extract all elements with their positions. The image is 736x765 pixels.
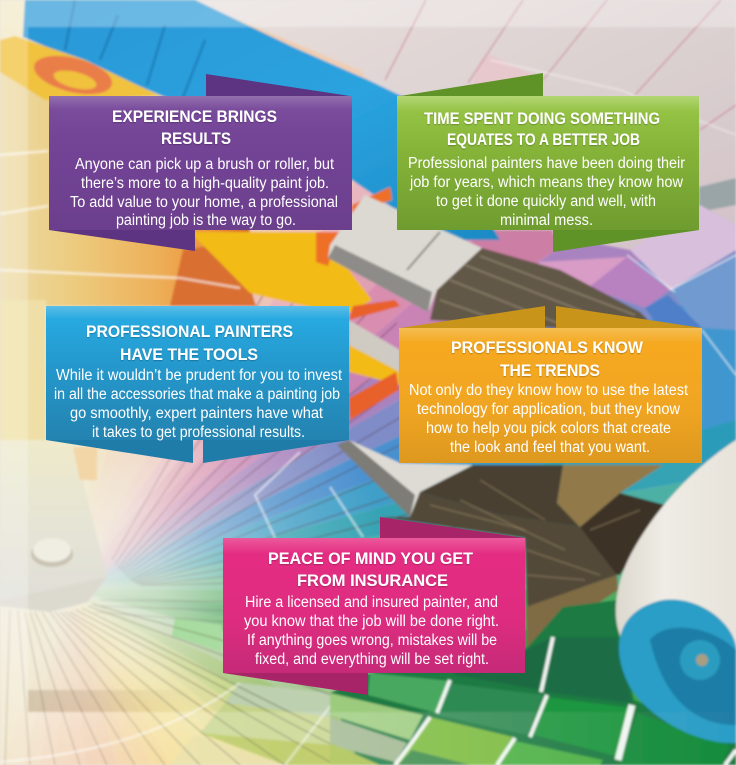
blue heading [86, 323, 293, 364]
green top fold [400, 73, 543, 96]
purple bottom fold [49, 230, 195, 251]
middle brush bristles [420, 465, 665, 575]
roller hub [680, 640, 720, 680]
green heading: EQUATES TO A BETTER JOB [447, 131, 640, 149]
roller nut [696, 654, 708, 666]
roller blue end cap [619, 599, 736, 743]
darker beige band at lower left [28, 690, 198, 712]
blue body text: go smoothly, expert painters have what [70, 405, 324, 422]
pink body text [244, 594, 499, 668]
green swatches bottom right [330, 600, 736, 765]
fan ray lines [5, 239, 495, 765]
orange heading [451, 339, 643, 380]
paint roller [616, 440, 736, 743]
blue body text [54, 367, 343, 441]
pink lavender and blue swatches [470, 205, 736, 470]
pink body text: fixed, and everything will be set right. [255, 651, 489, 668]
purple body text: To add value to your home, a professional [70, 194, 338, 211]
orange top fold right [556, 306, 702, 328]
green body text: job for years, which means they know how [409, 174, 684, 191]
purple heading: EXPERIENCE BRINGS [112, 108, 277, 126]
panel: professional painters have the tools [46, 306, 349, 463]
pink body text: If anything goes wrong, mistakes will be [247, 632, 497, 649]
roller cap recess [650, 628, 736, 725]
orange body text: how to help you pick colors that create [426, 420, 671, 437]
pink body text: Hire a licensed and insured painter, and [245, 594, 498, 611]
purple top fold [206, 74, 350, 96]
lower brush bristles [380, 480, 640, 650]
orange body text: technology for application, but they know [417, 401, 681, 418]
middle brush ferrule [349, 320, 400, 372]
green panel body [397, 96, 699, 230]
metal rod top right [699, 178, 736, 212]
pink panel body [223, 538, 525, 673]
light swatches top right [190, 0, 736, 250]
blue heading: HAVE THE TOOLS [120, 346, 258, 364]
yellow and orange swatches left [0, 60, 256, 306]
pink heading [268, 550, 473, 590]
purple heading: RESULTS [161, 130, 231, 148]
orange body text: Not only do they know how to use the latest [409, 382, 689, 399]
yellow handle with orange ring [0, 36, 160, 101]
green body text: Professional painters have been doing their [408, 155, 685, 172]
blue heading: PROFESSIONAL PAINTERS [86, 323, 293, 341]
pink heading: PEACE OF MIND YOU GET [268, 550, 473, 568]
blue body text: in all the accessories that make a painting job [54, 386, 340, 403]
purple body text: painting job is the way to go. [116, 212, 296, 229]
pink bottom fold [223, 673, 368, 695]
second yellow handle and orange ferrule [190, 187, 400, 420]
green body text [408, 155, 685, 229]
green body text: minimal mess. [500, 212, 593, 229]
blue body text: it takes to get professional results. [92, 424, 305, 441]
green body text: to get it done quickly and well, with [436, 193, 656, 210]
panel: experience brings results [49, 74, 352, 251]
pale green fan swatches near the centre [170, 618, 380, 765]
blue bottom fold left [46, 440, 193, 463]
orange body text [409, 382, 689, 456]
orange heading: THE TRENDS [500, 362, 600, 380]
green bottom fold [553, 230, 699, 252]
pink top fold [380, 517, 525, 538]
orange panel body [399, 328, 702, 463]
green heading: TIME SPENT DOING SOMETHING [424, 110, 660, 128]
orange body text: the look and feel that you want. [450, 439, 650, 456]
blue bottom fold right [203, 440, 349, 463]
blue brush handle [23, 0, 500, 240]
purple body text: Anyone can pick up a brush or roller, but [75, 156, 335, 173]
panel: peace of mind from insurance [223, 517, 525, 695]
orange heading: PROFESSIONALS KNOW [451, 339, 643, 357]
green heading [424, 110, 660, 149]
pink body text: you know that the job will be done right. [244, 613, 499, 630]
purple panel body [49, 96, 352, 230]
purple body text [70, 156, 338, 229]
blue panel body [46, 306, 349, 440]
purple body text: there’s more to a high-quality paint job. [81, 175, 329, 192]
fan ring separators [0, 452, 363, 765]
panel: time spent [397, 73, 699, 252]
upper brush [328, 195, 648, 330]
blue body text: While it wouldn’t be prudent for you to invest [56, 367, 343, 384]
orange top fold left [400, 306, 545, 328]
pale swatches left [0, 300, 46, 440]
pink heading: FROM INSURANCE [297, 572, 448, 590]
panel: professionals know the trends [399, 306, 702, 463]
purple heading [112, 108, 277, 148]
lower brush ferrule [337, 440, 473, 517]
white card with paint blob [0, 440, 107, 612]
